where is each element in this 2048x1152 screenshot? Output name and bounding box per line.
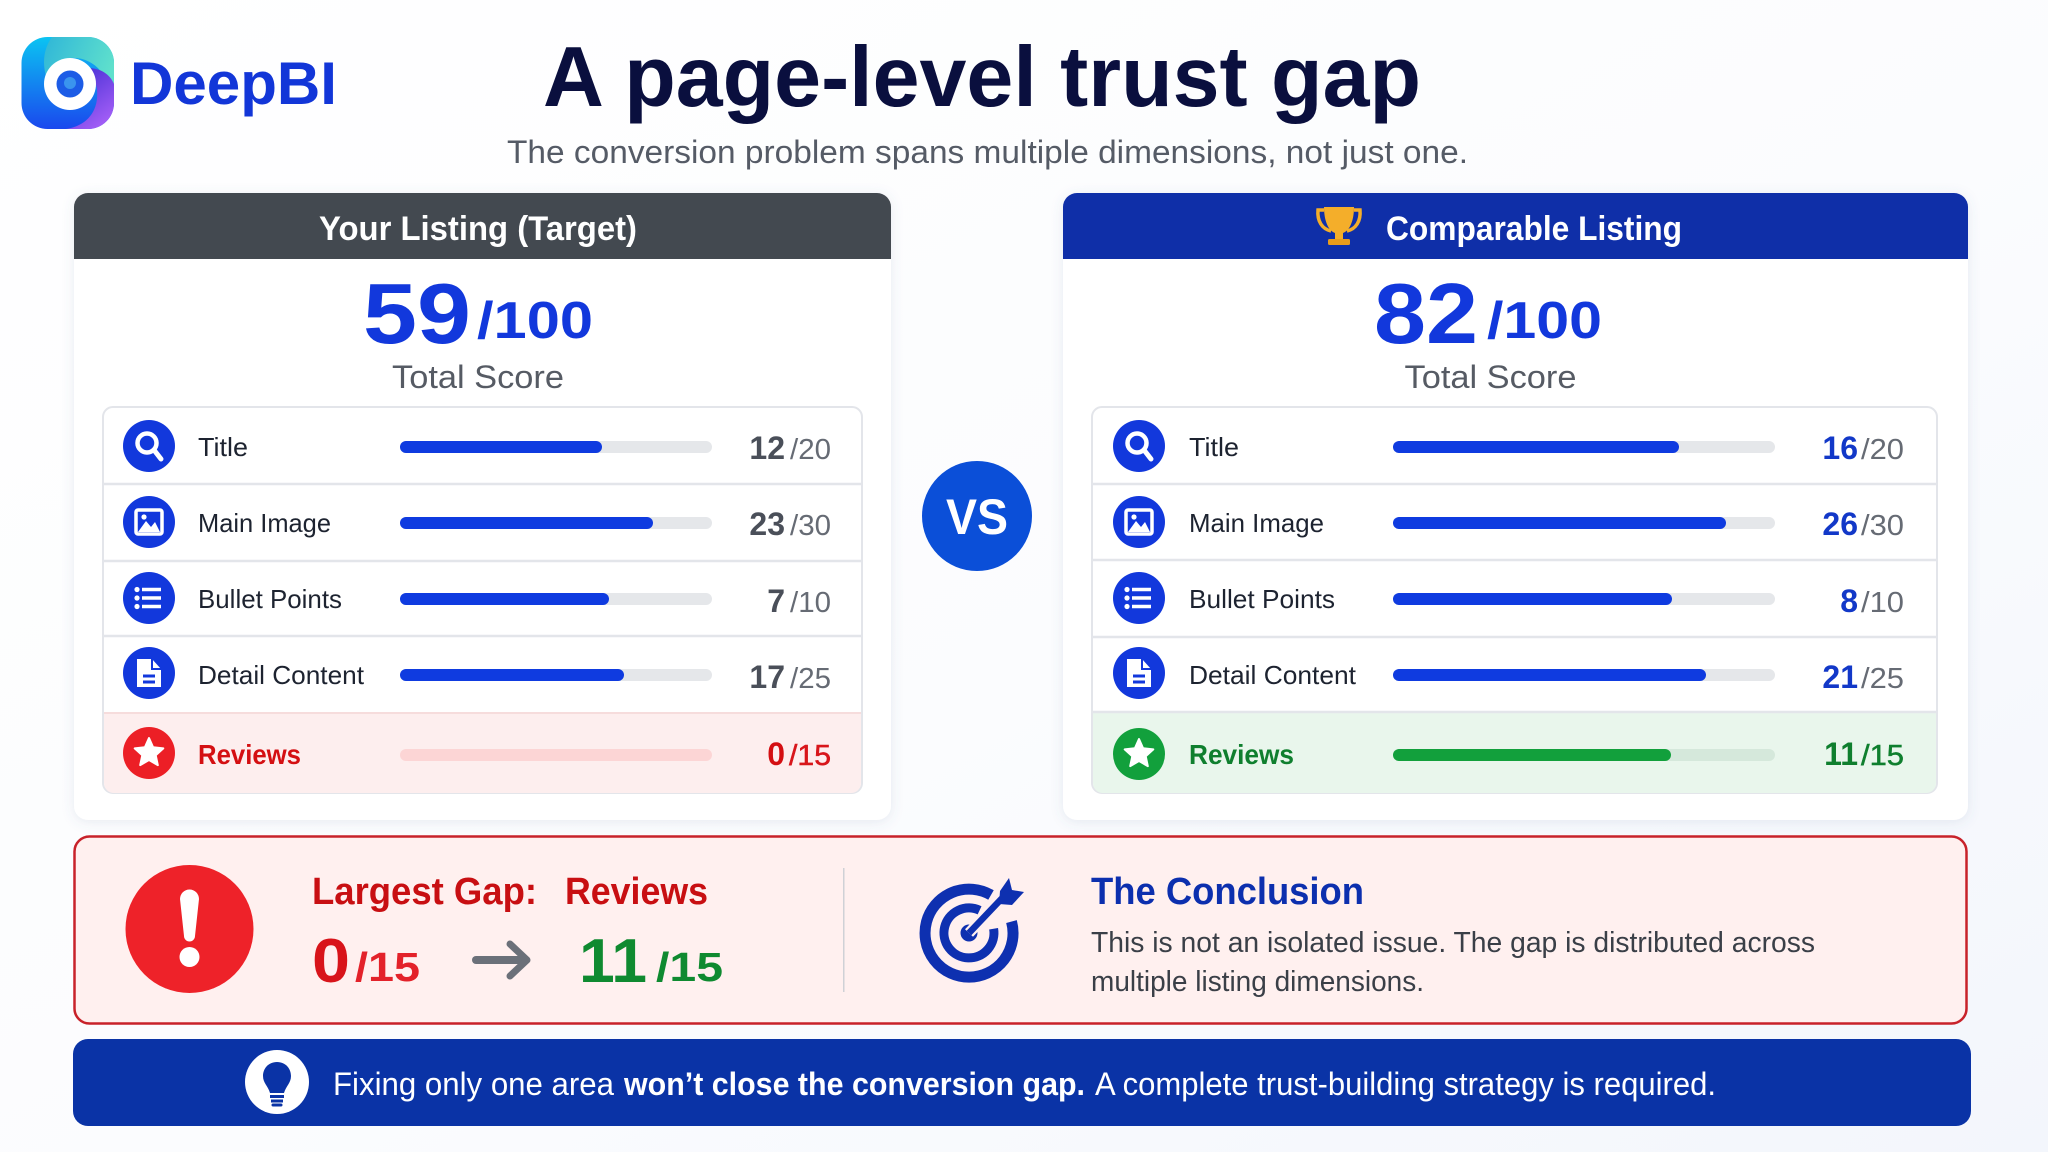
gap score: 0/15: /15 (355, 944, 420, 990)
row: main image: Main Image (1189, 508, 1324, 538)
row: title: 12 (749, 430, 785, 466)
conclusion text: The Conclusion (1091, 871, 1364, 913)
row: title (123, 420, 831, 472)
row: bullet points: 7 (767, 583, 785, 619)
banner text: won’t close the conversion gap. (623, 1066, 1085, 1102)
row: bullet points: 8 (1840, 583, 1858, 619)
logo: DeepBI (21, 37, 337, 129)
total score: 82/100: /100 (1487, 292, 1602, 350)
row: detail content (1113, 647, 1904, 699)
row: detail content: /25 (790, 663, 831, 695)
icon: alert (126, 865, 254, 993)
row: main image: 26 (1822, 506, 1858, 542)
total score: 82/100: Total Score (1404, 359, 1576, 395)
icon: document (123, 647, 175, 699)
largest gap heading: Reviews (565, 871, 708, 913)
row: detail content: 17 (749, 659, 785, 695)
score table: comparable listing (1092, 407, 1937, 793)
banner text: Fixing only one area (333, 1066, 614, 1102)
row: title: /20 (1861, 434, 1904, 466)
row: reviews (1113, 728, 1904, 780)
row: reviews: 11 (1824, 736, 1858, 772)
row: reviews: Reviews (1189, 739, 1294, 770)
row: main image: /30 (790, 510, 831, 542)
gap score: 0/15 (312, 927, 420, 996)
callout: largest gap and conclusion (74, 836, 1966, 1024)
row: main image: 23 (749, 506, 785, 542)
banner text (333, 1066, 1716, 1102)
VS badge (922, 461, 1032, 571)
icon: image (123, 496, 175, 548)
row: bullet points: /10 (1861, 587, 1904, 619)
conclusion text (1091, 871, 1815, 998)
row: bullet points: Bullet Points (1189, 584, 1335, 614)
gap score: 11/15: 11 (579, 927, 647, 996)
row: title: 16 (1822, 430, 1858, 466)
gap score: 0/15: 0 (312, 927, 350, 996)
panel: your listing (74, 193, 891, 820)
icon: target (925, 878, 1024, 977)
total score: 59/100 (363, 267, 593, 395)
gap score: 11/15 (579, 927, 723, 996)
icon: search (1113, 420, 1165, 472)
panel header: your listing: Your Listing (Target) (319, 210, 637, 248)
row: reviews (123, 727, 831, 779)
VS badge: VS (946, 489, 1008, 545)
row: main image: Main Image (198, 508, 331, 538)
panel header: comparable listing: Comparable Listing (1386, 210, 1682, 248)
total score: 59/100: 59 (363, 267, 471, 362)
arrow (476, 944, 527, 976)
conclusion text: multiple listing dimensions. (1091, 966, 1424, 998)
row: detail content: Detail Content (198, 660, 365, 690)
row: bullet points: /10 (790, 587, 831, 619)
row: detail content: /25 (1861, 663, 1904, 695)
takeaway banner (73, 1039, 1971, 1126)
row: reviews: /15 (1861, 740, 1904, 772)
subtitle: The conversion problem spans multiple dimensions, not just one. (507, 134, 1468, 170)
icon: lightbulb (245, 1050, 309, 1114)
largest gap heading (312, 871, 708, 913)
row: main image (123, 496, 831, 548)
total score: 59/100: Total Score (392, 359, 564, 395)
total score: 59/100: /100 (477, 292, 593, 350)
panel header: your listing (74, 193, 891, 259)
logo wordmark: DeepBI (130, 50, 337, 117)
icon: trophy (1318, 207, 1360, 245)
row: reviews: 0 (767, 736, 785, 772)
row: detail content (123, 647, 831, 699)
panel header: comparable listing (1063, 193, 1968, 259)
row: main image (1113, 496, 1904, 548)
row: detail content: Detail Content (1189, 660, 1357, 690)
row: bullet points (123, 572, 831, 624)
banner text: A complete trust-building strategy is required. (1095, 1066, 1716, 1102)
row: title: /20 (790, 434, 831, 466)
largest gap heading: Largest Gap: (312, 871, 537, 913)
row: main image: /30 (1861, 510, 1904, 542)
icon: document (1113, 647, 1165, 699)
icon: image (1113, 496, 1165, 548)
row: reviews: Reviews (198, 739, 301, 770)
row: title (1113, 420, 1904, 472)
row: reviews: /15 (789, 740, 831, 772)
row: bullet points (1113, 572, 1904, 624)
score table: your listing (103, 407, 862, 793)
row: title: Title (1189, 432, 1239, 462)
conclusion text: This is not an isolated issue. The gap is distributed across (1091, 927, 1815, 959)
row: bullet points: Bullet Points (198, 584, 342, 614)
title: A page-level trust gap (543, 30, 1421, 125)
gap score: 11/15: /15 (656, 944, 723, 990)
icon: list (123, 572, 175, 624)
row: title: Title (198, 432, 248, 462)
total score: 82/100: 82 (1374, 267, 1478, 362)
total score: 82/100 (1374, 267, 1602, 395)
icon: green star (1113, 728, 1165, 780)
row: detail content: 21 (1822, 659, 1858, 695)
panel: comparable listing (1063, 193, 1968, 820)
icon: list (1113, 572, 1165, 624)
icon: DeepBI swirl (21, 37, 115, 129)
icon: search (123, 420, 175, 472)
icon: red star (123, 727, 175, 779)
